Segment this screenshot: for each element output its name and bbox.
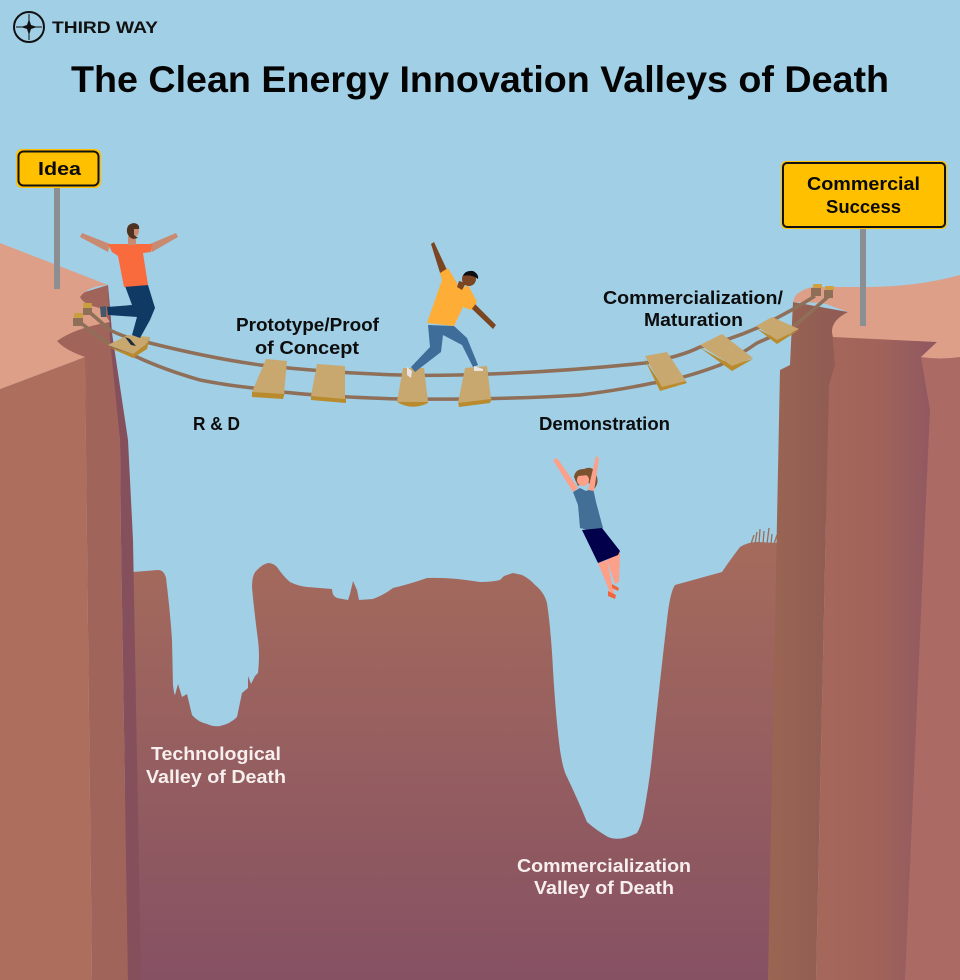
valley label: technological: Valley of Death	[146, 767, 286, 787]
commercial success sign: Success	[826, 197, 901, 217]
person: man in yellow shirt	[407, 242, 496, 378]
commercial success sign	[781, 161, 947, 326]
plank 2	[252, 359, 287, 399]
plank 1	[108, 335, 150, 358]
third way logo	[14, 12, 159, 42]
lower rope	[77, 296, 829, 399]
stage label: prototype	[236, 315, 380, 358]
valley floor with two valleys of death	[125, 542, 800, 980]
stage label: R & D: R & D	[193, 414, 240, 434]
plank 8	[756, 317, 799, 344]
plank 5	[458, 366, 492, 407]
valley label: technological	[146, 744, 286, 787]
title: The Clean Energy Innovation Valleys of Death	[71, 59, 889, 100]
person: man in orange shirt	[80, 223, 178, 346]
idea sign: Idea	[38, 159, 82, 179]
commercial success sign: Commercial	[807, 174, 920, 194]
stage label: commercialization	[603, 288, 783, 330]
right cliff	[768, 275, 960, 980]
idea sign	[16, 149, 101, 289]
right rope anchors	[811, 284, 834, 298]
valley label: commercialization: Valley of Death	[534, 878, 674, 898]
upper rope	[87, 296, 815, 375]
sign pole	[860, 229, 866, 326]
left rope anchors	[73, 303, 92, 326]
person: falling woman	[553, 456, 620, 599]
plank 6	[644, 352, 687, 391]
stage label: commercialization: Commercialization/	[603, 288, 783, 308]
left cliff	[0, 243, 141, 980]
plank 7	[699, 334, 753, 371]
stage label: commercialization: Maturation	[644, 310, 743, 330]
plank 4	[397, 368, 428, 407]
stage label: prototype: Prototype/Proof	[236, 315, 380, 335]
valley label: commercialization: Commercialization	[517, 856, 691, 876]
grass tuft on the right ledge	[751, 528, 777, 544]
stage label: prototype: of Concept	[255, 338, 359, 358]
valley label: technological: Technological	[151, 744, 281, 764]
rope bridge	[73, 284, 834, 407]
plank 3	[311, 364, 346, 403]
logo mark	[14, 12, 44, 42]
sign pole	[54, 188, 60, 289]
third way logo: THIRD WAY	[52, 18, 159, 37]
stage label: demonstration: Demonstration	[539, 414, 670, 434]
valley label: commercialization	[517, 856, 691, 898]
